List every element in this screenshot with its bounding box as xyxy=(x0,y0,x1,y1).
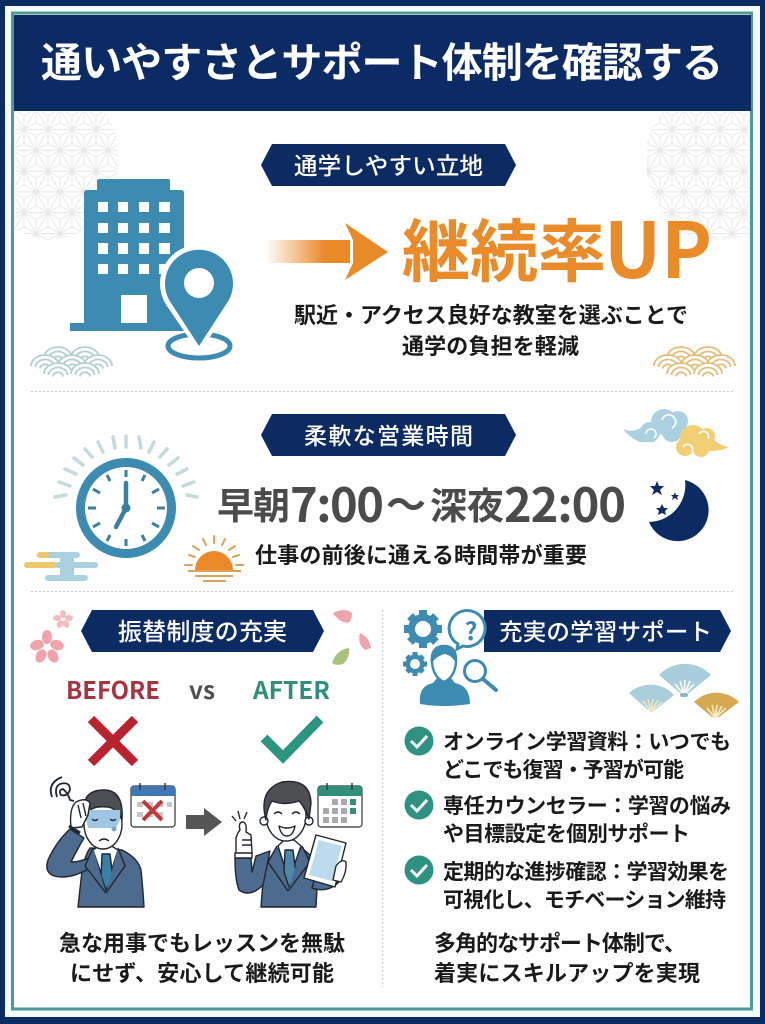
checklist item 1: どこでも復習・予習が可能 xyxy=(443,754,684,784)
description: 通学の負担を軽減 xyxy=(402,329,579,361)
panel: learning support xyxy=(403,610,739,988)
decoration: clouds top right xyxy=(623,409,729,457)
arrow: before to after xyxy=(186,808,222,836)
pill heading: location: 通学しやすい立地 xyxy=(294,147,483,181)
label: after: AFTER xyxy=(252,671,330,706)
wave pattern left xyxy=(31,347,112,383)
illustration: calendar with schedule xyxy=(318,783,362,827)
icon: clock xyxy=(55,436,197,554)
caption: 着実にスキルアップを実現 xyxy=(434,956,700,988)
hours text: 7:00 xyxy=(290,467,384,536)
checklist item 2 xyxy=(404,790,731,848)
checklist item 3 xyxy=(404,856,729,914)
checklist item 3: 可視化し、モチベーション維持 xyxy=(443,884,726,914)
big label: 継続率 xyxy=(402,197,606,296)
checklist item 1: オンライン学習資料：いつでも xyxy=(443,726,731,756)
icon: check xyxy=(404,790,434,820)
checklist item 1 xyxy=(404,726,731,784)
caption xyxy=(434,926,700,988)
pill heading: location xyxy=(261,144,516,186)
icon: check xyxy=(404,726,434,756)
small gear xyxy=(403,652,427,676)
hours text xyxy=(217,467,626,536)
pill heading: makeup lessons: 振替制度の充実 xyxy=(118,612,287,647)
checklist item 2: 専任カウンセラー：学習の悩み xyxy=(443,790,731,820)
icon: moon and stars xyxy=(649,480,709,541)
decoration: cherry blossoms xyxy=(29,610,371,665)
big label: UP xyxy=(604,190,712,301)
speech bubble: ? xyxy=(465,612,477,648)
icon: check xyxy=(264,719,320,757)
illustration: worried man xyxy=(47,777,144,907)
pill heading: makeup lessons xyxy=(81,610,324,652)
icon: cross xyxy=(91,719,135,763)
big label xyxy=(402,190,712,301)
caption: 急な用事でもレッスンを無駄 xyxy=(59,926,345,958)
panel: makeup lessons xyxy=(29,610,371,988)
description: 駅近・アクセス良好な教室を選ぶことで xyxy=(294,298,688,330)
pill heading: learning support: 充実の学習サポート xyxy=(499,613,712,647)
hours text: 早朝 xyxy=(217,476,290,530)
header banner xyxy=(14,15,751,111)
illustration: calendar with cross xyxy=(131,783,175,827)
decoration: mist lines xyxy=(24,552,98,581)
section: hours xyxy=(55,414,709,581)
pill heading: hours: 柔軟な営業時間 xyxy=(304,417,473,451)
caption: 多角的なサポート体制で、 xyxy=(434,926,686,958)
icon: support person xyxy=(403,610,496,706)
label: vs: vs xyxy=(189,671,215,706)
hours text: 深夜 xyxy=(430,476,504,530)
pill heading: learning support xyxy=(484,610,731,652)
big gear xyxy=(404,610,442,648)
section: location xyxy=(70,144,712,361)
hours text: ～ xyxy=(386,473,426,531)
note text: 仕事の前後に通える時間帯が重要 xyxy=(255,538,587,570)
description xyxy=(294,298,688,361)
icon: sunrise xyxy=(185,536,243,581)
title: 通いやすさとサポート体制を確認する xyxy=(41,29,723,89)
icon: check xyxy=(404,856,434,884)
decoration: fans xyxy=(629,664,739,718)
caption xyxy=(59,926,345,988)
caption: にせず、安心して継続可能 xyxy=(70,956,334,988)
wave pattern right xyxy=(654,347,735,383)
checklist item 3: 定期的な進捗確認：学習効果を xyxy=(443,856,729,886)
asanoha pattern right xyxy=(640,112,751,242)
asanoha pattern left xyxy=(14,112,124,242)
illustration: happy man xyxy=(232,781,346,907)
hours text: 22:00 xyxy=(504,467,626,536)
arrow xyxy=(266,223,388,280)
checklist item 2: や目標設定を個別サポート xyxy=(443,818,690,848)
person xyxy=(420,645,470,706)
icon: building with map pin xyxy=(70,179,238,358)
pill heading: hours xyxy=(261,414,516,456)
magnifier xyxy=(464,660,496,690)
label: before: BEFORE xyxy=(66,671,160,706)
